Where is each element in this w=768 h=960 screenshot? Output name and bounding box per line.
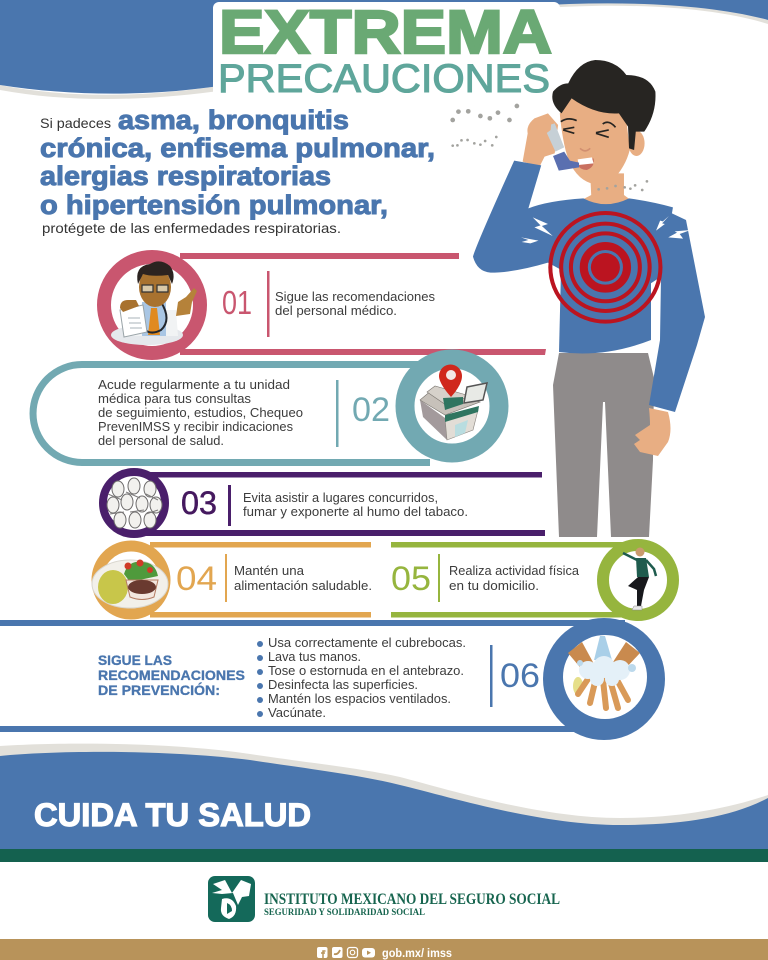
- pain sparks: [521, 216, 691, 243]
- text 04: [234, 564, 372, 593]
- panel 06: prevention: [0, 618, 665, 740]
- heading 06: RECOMENDACIONES: [98, 668, 245, 683]
- bullet list: Usa correctamente el cubrebocas.: [268, 636, 466, 650]
- right sleeve: [649, 203, 705, 412]
- bullet list: Desinfecta las superficies.: [268, 678, 418, 692]
- icon: washing hands: [543, 618, 665, 740]
- bullet list: [257, 636, 466, 720]
- face: [560, 98, 630, 184]
- panel 01: medical staff: [104, 253, 546, 355]
- panel 05: physical activity: [391, 542, 673, 618]
- heading 06: SIGUE LAS: [98, 653, 172, 668]
- inhaler: [544, 123, 564, 152]
- text 02: del personal de salud.: [98, 434, 224, 448]
- breath dots: [450, 104, 648, 191]
- IMSS logo: SEGURIDAD Y SOLIDARIDAD SOCIAL: [264, 907, 425, 917]
- text 01: Sigue las recomendaciones: [275, 290, 435, 304]
- eyes and brows: [561, 119, 616, 137]
- footer url: gob.mx/ imss: [382, 946, 452, 960]
- bullet list: Tose o estornuda en el antebrazo.: [268, 664, 464, 678]
- intro text block: [40, 105, 435, 236]
- divider 03: [228, 485, 231, 526]
- hair: [552, 60, 656, 150]
- IMSS logo: [208, 876, 560, 922]
- mouth: [578, 158, 594, 170]
- panel 02: medical unit visits: [33, 359, 499, 462]
- panel 03: avoid crowds: [103, 472, 545, 536]
- icon: plate of food: [92, 546, 168, 614]
- text 03: Evita asistir a lugares concurridos,: [243, 491, 438, 505]
- intro text block: alergias respiratorias: [40, 161, 331, 191]
- icon: clinic with map pin: [405, 359, 499, 453]
- torso lower: [559, 270, 651, 354]
- title: EXTREMA: [219, 0, 552, 66]
- text 02: PrevenIMSS y recibir indicaciones: [98, 420, 293, 434]
- text 04: Mantén una: [234, 564, 304, 578]
- divider 02: [336, 380, 338, 447]
- icon: doctor: [104, 257, 200, 353]
- text 05: [449, 564, 579, 593]
- social icons: [317, 947, 375, 958]
- divider 06: [490, 645, 492, 707]
- number 04: 04: [176, 560, 217, 598]
- text 02: de seguimiento, estudios, Chequeo: [98, 406, 303, 420]
- text 04: alimentación saludable.: [234, 579, 372, 593]
- fingers: [537, 122, 551, 138]
- bars 04: [150, 542, 371, 618]
- bars 01: [180, 253, 546, 355]
- icon: crowd: [103, 472, 165, 534]
- icon: person exercising: [603, 545, 673, 615]
- banner slogan: CUIDA TU SALUD: [34, 797, 311, 833]
- number 02: 02: [352, 391, 390, 429]
- neck: [582, 173, 631, 205]
- bars 06: [0, 620, 625, 732]
- divider 05: [438, 554, 440, 602]
- title: [218, 0, 552, 101]
- heading 06: DE PREVENCIÓN:: [98, 683, 220, 698]
- bars 03: [140, 472, 545, 536]
- number 06: 06: [500, 657, 540, 695]
- intro text block: Si padeces: [40, 115, 111, 131]
- text 01: [275, 290, 435, 318]
- top blue wave background: [0, 0, 768, 99]
- pain rings: [550, 213, 660, 322]
- logo text: INSTITUTO MEXICANO DEL SEGURO SOCIAL: [264, 891, 560, 908]
- illustration: man with inhaler and chest pain: [450, 60, 705, 537]
- panel 04: healthy eating: [92, 542, 372, 618]
- green band: [0, 849, 768, 862]
- bullet list: Mantén los espacios ventilados.: [268, 692, 451, 706]
- bottom blue wave banner: [0, 744, 768, 850]
- text 02: médica para tus consultas: [98, 392, 251, 406]
- intro text block: protégete de las enfermedades respiratorias.: [42, 220, 341, 236]
- text 03: [243, 491, 468, 519]
- divider 01: [267, 271, 270, 337]
- upper body drawn in zoom coordinates: [450, 60, 691, 322]
- logo mark: [208, 876, 255, 922]
- lower hand: [634, 408, 670, 456]
- number 03: 03: [181, 485, 217, 521]
- bullet list: Lava tus manos.: [268, 650, 361, 664]
- title: PRECAUCIONES: [218, 57, 550, 101]
- trousers: [553, 353, 654, 537]
- text 01: del personal médico.: [275, 304, 397, 318]
- text 03: fumar y exponerte al humo del tabaco.: [243, 505, 468, 519]
- bullet list: Vacúnate.: [268, 706, 326, 720]
- ear: [628, 131, 645, 156]
- bars 05: [391, 542, 625, 618]
- shirt upper: [473, 161, 673, 317]
- stadium frame 02: [33, 364, 430, 462]
- number 05: 05: [391, 560, 431, 598]
- text 05: en tu domicilio.: [449, 579, 539, 593]
- footer band: [0, 939, 768, 960]
- number 01: 01: [222, 284, 252, 321]
- intro text block: crónica, enfisema pulmonar,: [40, 133, 435, 163]
- intro text block: asma, bronquitis: [118, 105, 349, 135]
- heading 06: [98, 653, 245, 698]
- text 05: Realiza actividad física: [449, 564, 579, 578]
- text 02: Acude regularmente a tu unidad: [98, 378, 290, 392]
- raised arm hand: [523, 113, 558, 167]
- nose: [580, 148, 590, 151]
- divider 04: [225, 554, 227, 602]
- text 02: [98, 378, 303, 448]
- intro text block: o hipertensión pulmonar,: [40, 190, 388, 220]
